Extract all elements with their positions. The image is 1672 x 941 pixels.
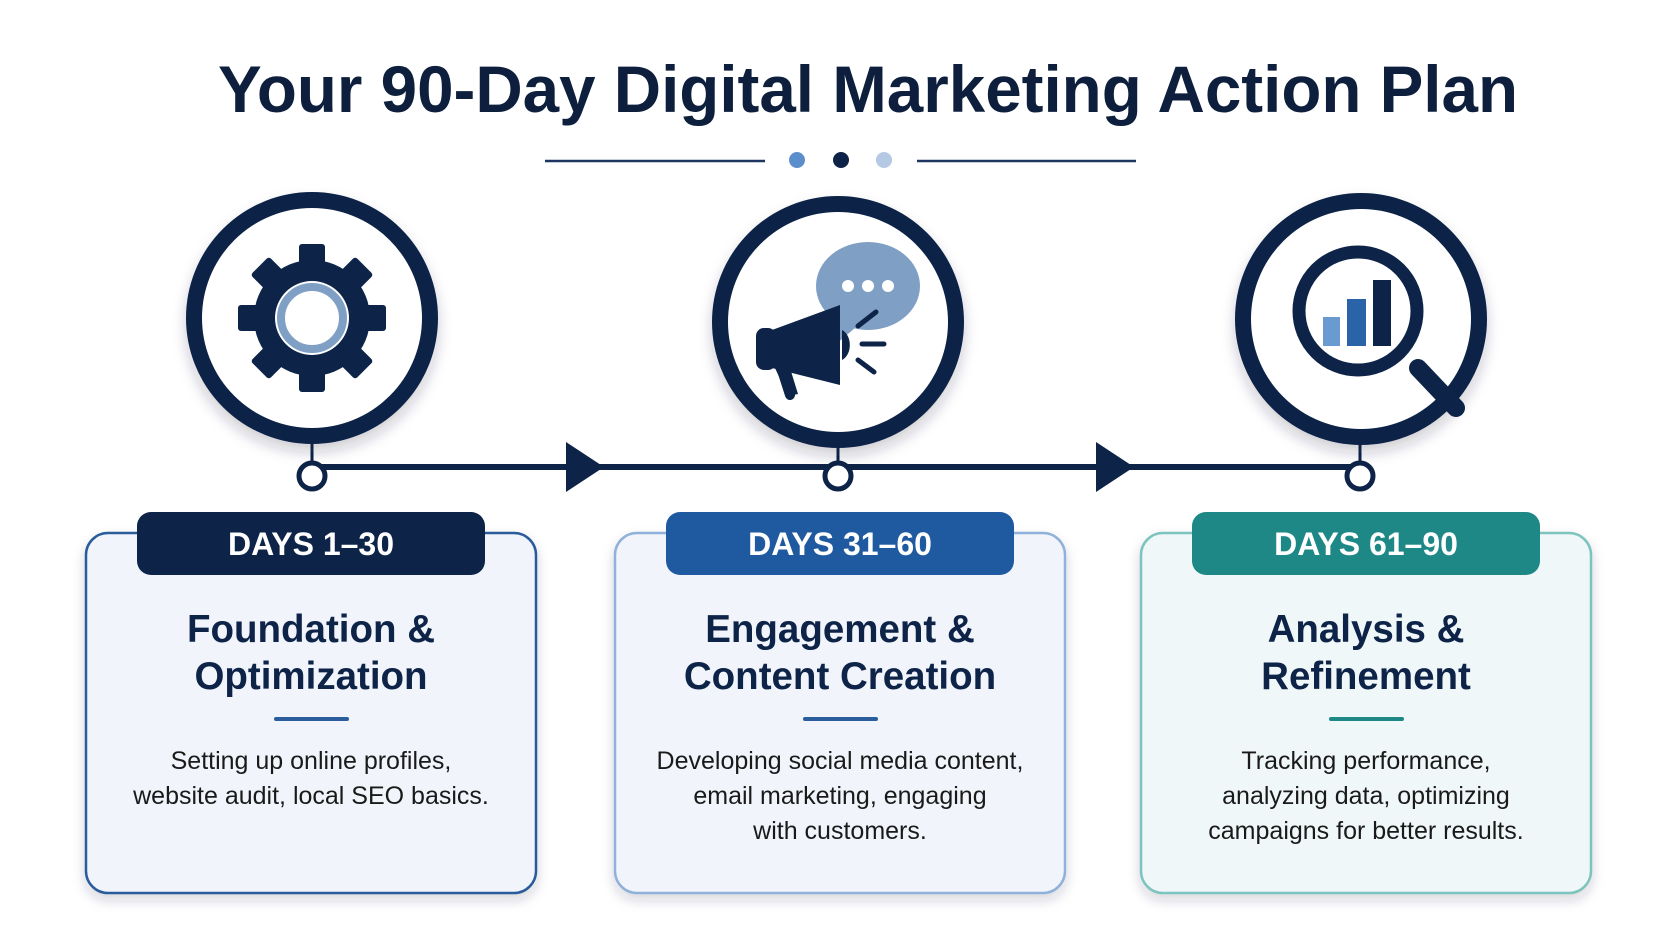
- badge: days 61-90: [1192, 512, 1540, 575]
- divider with dots: [545, 152, 1136, 168]
- arrow 1: [566, 442, 604, 492]
- node 1: [299, 463, 325, 489]
- body text: website audit, local SEO basics.: [132, 782, 489, 810]
- body text: Tracking performance,: [1241, 747, 1491, 775]
- icon circle: magnifier: [1243, 201, 1479, 437]
- icon: gear: [238, 244, 386, 392]
- body text: email marketing, engaging: [693, 782, 987, 810]
- icon circle: gear: [194, 200, 430, 436]
- heading: Foundation &: [187, 608, 435, 651]
- node 2: [825, 463, 851, 489]
- icon: megaphone: [756, 305, 884, 396]
- heading: Engagement &: [705, 608, 975, 651]
- body text: with customers.: [752, 817, 927, 845]
- badge: days 1-30: DAYS 1–30: [228, 526, 394, 562]
- body text: analyzing data, optimizing: [1222, 782, 1510, 810]
- badge: days 1-30: [137, 512, 485, 575]
- heading: Content Creation: [684, 655, 996, 698]
- heading: Refinement: [1261, 655, 1471, 698]
- badge: days 31-60: [666, 512, 1014, 575]
- timeline line: [312, 440, 1360, 467]
- heading: Analysis &: [1268, 608, 1464, 651]
- title: Your 90-Day Digital Marketing Action Plan: [218, 52, 1518, 126]
- panel: days 1-30: [86, 512, 536, 893]
- badge: days 31-60: DAYS 31–60: [748, 526, 932, 562]
- node 3: [1347, 463, 1373, 489]
- icon: magnifier with bars: [1299, 252, 1456, 408]
- panel: days 31-60: [615, 512, 1065, 893]
- body text: Setting up online profiles,: [171, 747, 451, 775]
- body text: campaigns for better results.: [1208, 817, 1524, 845]
- badge: days 61-90: DAYS 61–90: [1274, 526, 1458, 562]
- icon circle: megaphone: [720, 204, 956, 440]
- arrow 2: [1096, 442, 1134, 492]
- panel: days 61-90: [1141, 512, 1591, 893]
- icon: speech bubble: [816, 242, 920, 345]
- body text: Developing social media content,: [657, 747, 1023, 775]
- heading: Optimization: [194, 655, 428, 698]
